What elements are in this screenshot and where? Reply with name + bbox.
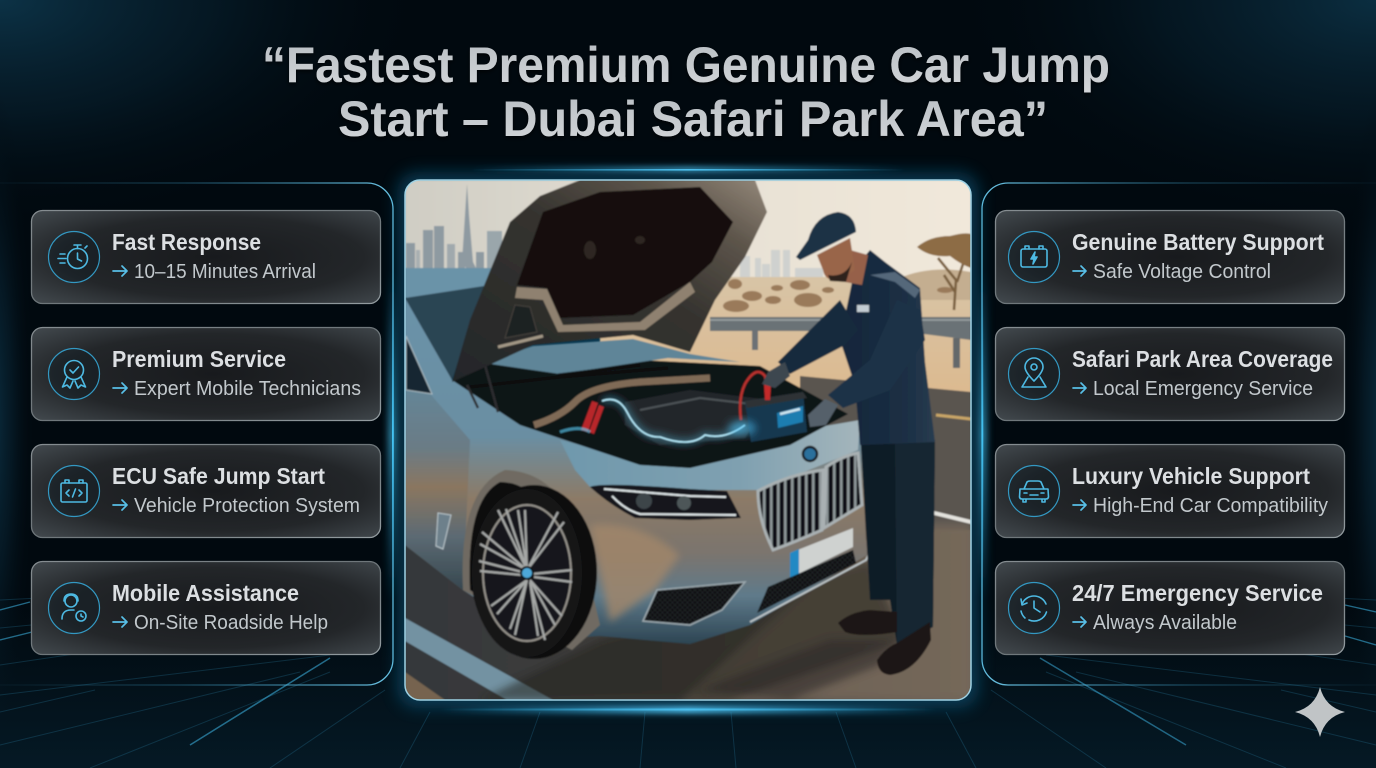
cap (796, 212, 856, 260)
icon: sparkle star (1295, 687, 1345, 737)
road (405, 520, 971, 700)
hood surface (560, 420, 860, 490)
text: Always Available (1093, 612, 1237, 634)
engine cover (625, 390, 770, 445)
photo: technician jump-starting car (397, 172, 979, 708)
neck and face (845, 250, 868, 285)
door vent (436, 513, 451, 549)
car body (405, 298, 872, 644)
text (1072, 346, 1333, 400)
text: Expert Mobile Technicians (134, 378, 361, 400)
gloves (762, 362, 790, 388)
top glow line (470, 167, 906, 172)
text: ECU Safe Jump Start (112, 463, 325, 489)
text: Mobile Assistance (112, 580, 299, 606)
text: Premium Service (112, 346, 286, 372)
text (1072, 463, 1328, 517)
electric spark line (602, 399, 745, 442)
legs (860, 430, 935, 645)
icon: award ribbon (48, 348, 100, 400)
left panel frame (0, 183, 395, 685)
text: Fast Response (112, 229, 261, 255)
shoes (838, 610, 897, 635)
icon: map pin (1008, 348, 1060, 400)
icon: technician headset (48, 582, 100, 634)
text: Luxury Vehicle Support (1072, 463, 1310, 489)
lower intakes (643, 582, 745, 625)
card: Safari Park Area Coverage (996, 328, 1344, 420)
right skyline (740, 250, 823, 280)
text: Local Emergency Service (1093, 378, 1313, 400)
open hood (452, 180, 767, 382)
left skyline (406, 184, 502, 269)
text: On-Site Roadside Help (134, 612, 328, 634)
title: Start – Dubai Safari Park Area” (338, 91, 1048, 147)
road texture right (680, 524, 971, 700)
side window (406, 336, 432, 394)
bumper lip (750, 549, 871, 622)
road white stripe (405, 618, 553, 700)
door panel (406, 390, 470, 590)
sky (406, 180, 970, 278)
windscreen (405, 286, 484, 380)
card: Mobile Assistance (32, 562, 380, 654)
text: Safe Voltage Control (1093, 261, 1271, 283)
icon: ECU battery (48, 466, 100, 516)
wipers (470, 365, 668, 387)
near arm (828, 300, 925, 408)
icon: battery (1008, 232, 1060, 282)
icon: stopwatch (48, 232, 100, 282)
card: Premium Service (32, 328, 380, 420)
icon: 24/7 clock (1008, 582, 1060, 634)
card: Luxury Vehicle Support (996, 444, 1344, 538)
text: 10–15 Minutes Arrival (134, 261, 316, 283)
far arm (778, 300, 858, 374)
desert (598, 276, 970, 394)
card: ECU Safe Jump Start (32, 444, 380, 538)
icon: car (1008, 466, 1060, 516)
torso (840, 250, 935, 445)
title (262, 37, 1110, 147)
card: Fast Response (32, 210, 380, 304)
brown pipe (534, 378, 710, 425)
technician (762, 212, 935, 675)
windscreen lower (484, 339, 740, 374)
card: Genuine Battery Support (996, 210, 1344, 304)
text (1072, 580, 1323, 634)
text (112, 229, 316, 283)
right panel frame (980, 183, 1376, 685)
guard rail (710, 317, 971, 368)
headlight (590, 485, 741, 520)
wheel (463, 470, 600, 659)
strut (467, 358, 498, 412)
fender tan highlight (590, 524, 680, 622)
technician shadow (700, 640, 900, 700)
bottom glow line (440, 706, 936, 713)
number plate (790, 528, 853, 578)
shrubs (723, 279, 953, 312)
car roof (405, 268, 492, 300)
text (112, 463, 360, 517)
engine bay (452, 360, 848, 468)
acacia tree (917, 233, 971, 310)
card: 24/7 Emergency Service (996, 562, 1344, 654)
text: High-End Car Compatibility (1093, 495, 1328, 517)
text: Vehicle Protection System (134, 495, 360, 517)
BMW badge (803, 447, 817, 461)
battery (728, 372, 807, 442)
kidney grille (758, 453, 862, 550)
text (1072, 229, 1324, 283)
red clamps (581, 401, 604, 434)
title: “Fastest Premium Genuine Car Jump (262, 37, 1110, 93)
text (112, 346, 361, 400)
text: 24/7 Emergency Service (1072, 580, 1323, 606)
text (112, 580, 328, 634)
front shadow (480, 560, 905, 700)
text: Genuine Battery Support (1072, 229, 1324, 255)
text: Safari Park Area Coverage (1072, 346, 1333, 372)
